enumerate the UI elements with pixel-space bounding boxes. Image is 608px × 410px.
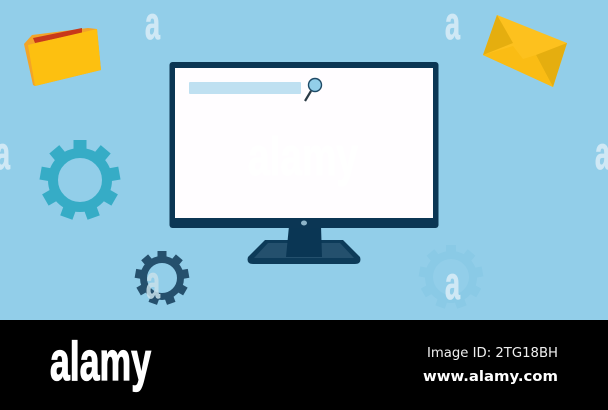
monitor frame <box>170 62 438 228</box>
monitor base <box>248 240 360 264</box>
watermark letters: a <box>146 256 160 308</box>
monitor screen <box>175 68 433 218</box>
watermark letters <box>0 0 608 309</box>
icon: small dark gear <box>135 251 189 305</box>
background panel <box>0 0 608 320</box>
image id: Image ID: 2TG18BH <box>427 345 558 361</box>
watermark on screen: alamy <box>248 127 358 187</box>
icon: folder <box>24 28 101 86</box>
watermark letters: a <box>445 257 460 309</box>
icon: large teal gear <box>39 140 121 220</box>
alamy logo: alamy <box>50 330 151 392</box>
website url: www.alamy.com <box>423 369 558 385</box>
icon: envelope <box>483 15 567 87</box>
search bar <box>189 82 301 94</box>
monitor <box>170 62 438 264</box>
icon: faint gear <box>419 245 483 309</box>
camera dot <box>301 220 307 226</box>
monitor neck <box>286 226 322 257</box>
icon: magnifying glass <box>305 78 322 101</box>
footer bar <box>0 320 608 410</box>
